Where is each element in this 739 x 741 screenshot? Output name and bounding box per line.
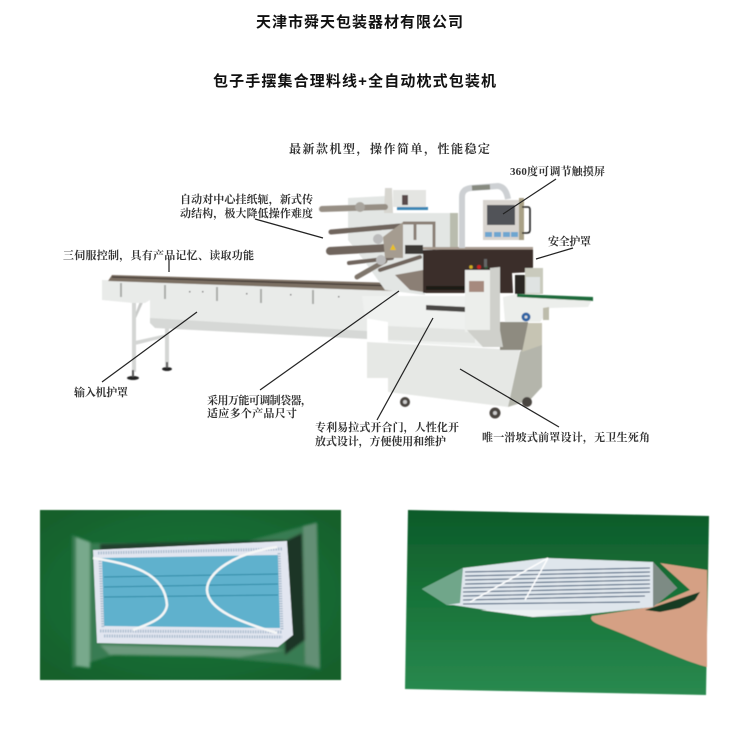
output conveyor xyxy=(503,268,593,322)
touch screen xyxy=(483,198,530,240)
label: roll holder: 动结构，极大降低操作难度 xyxy=(180,206,313,220)
infeed conveyor legs xyxy=(127,296,172,380)
photo: flat mask pack xyxy=(40,510,341,680)
tagline: 最新款机型，操作简单，性能稳定 xyxy=(289,141,490,156)
photo: side view pack xyxy=(405,510,709,695)
machine illustration xyxy=(102,186,593,418)
arrows xyxy=(102,179,573,427)
label: safety cover: 安全护罩 xyxy=(548,234,591,248)
label: front cover: 唯一滑坡式前罩设计，无卫生死角 xyxy=(482,430,650,444)
label: roll holder: 自动对中心挂纸轭，新式传 xyxy=(180,192,313,206)
plastic bag xyxy=(72,522,320,670)
pack xyxy=(422,558,677,617)
label: touch screen: 360度可调节触摸屏 xyxy=(510,164,605,178)
label: roll holder xyxy=(180,192,313,220)
title: 天津市舜天包装器材有限公司 xyxy=(256,13,463,31)
label: door: 放式设计，方便使用和维护 xyxy=(315,434,446,448)
label: servo control: 三伺服控制，具有产品记忆、读取功能 xyxy=(63,248,254,262)
label: door xyxy=(315,420,459,448)
hand xyxy=(591,563,707,667)
subtitle: 包子手摆集合理料线+全自动枕式包装机 xyxy=(213,72,496,90)
duct pipe xyxy=(462,186,508,248)
label: bag former xyxy=(207,393,312,420)
label: bag former: 采用万能可调制袋器， xyxy=(207,393,312,407)
infeed conveyor guard xyxy=(102,275,400,339)
mask stack xyxy=(93,541,293,647)
lower cabinet xyxy=(362,296,542,407)
ear loops xyxy=(93,547,277,633)
control box xyxy=(465,259,503,347)
label: bag former: 适应多个产品尺寸 xyxy=(207,406,297,420)
label: infeed cover: 输入机护罩 xyxy=(74,385,128,399)
forming rolls xyxy=(322,188,458,295)
sealing hood xyxy=(423,247,533,293)
casters xyxy=(400,397,532,418)
label: door: 专利易拉式开合门，人性化开 xyxy=(315,420,459,434)
